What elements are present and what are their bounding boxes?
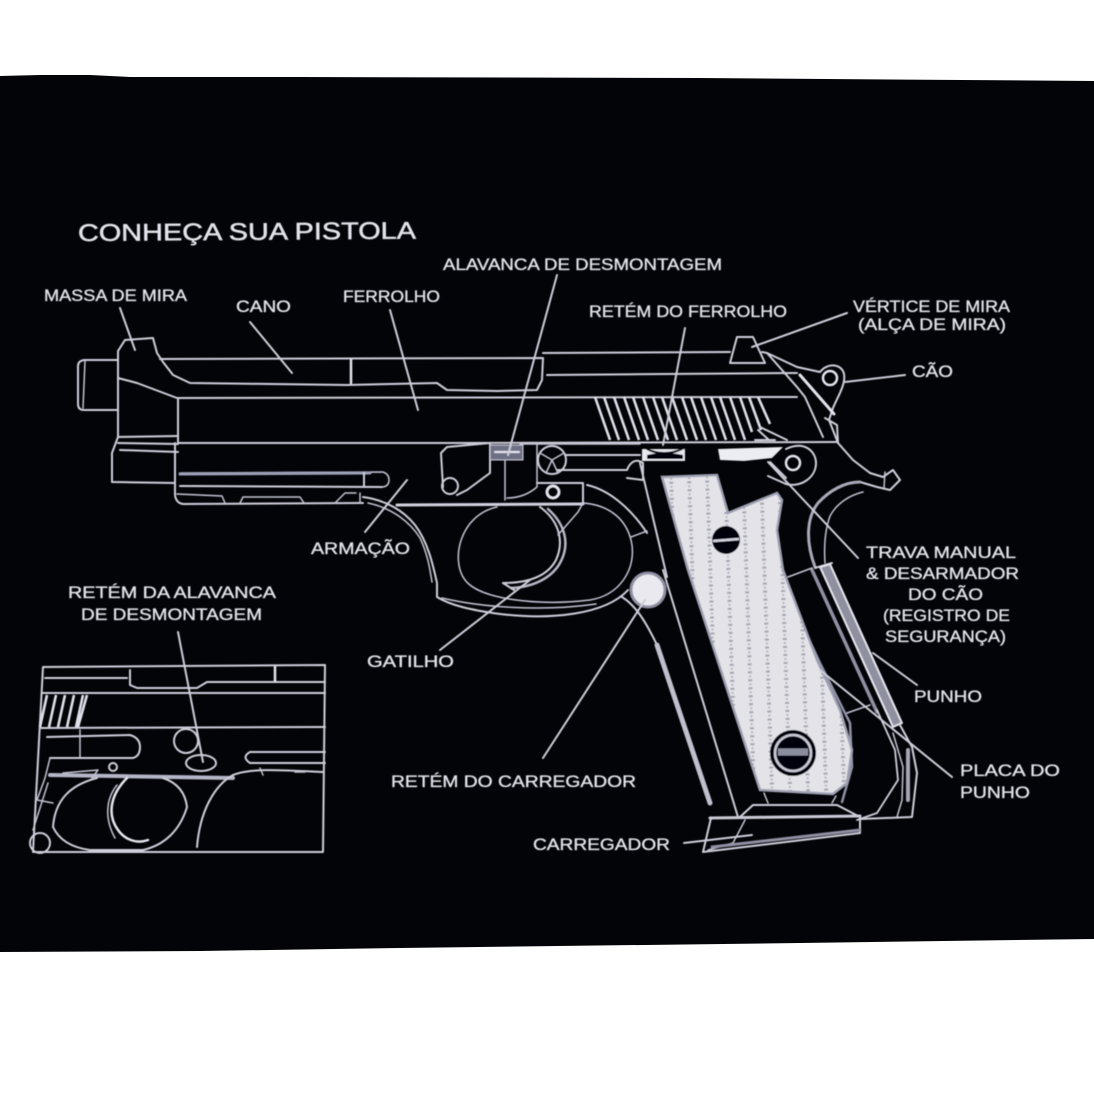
trigger <box>503 503 583 590</box>
icon: upper grip screw <box>712 526 740 554</box>
magazine catch button <box>631 573 665 607</box>
label: trava manual: DO CÃO <box>908 585 983 604</box>
label: vertice de mira <box>752 297 1011 347</box>
label: gatilho: GATILHO <box>367 652 454 671</box>
label: punho: PUNHO <box>914 687 982 706</box>
label: ferrolho <box>343 287 440 410</box>
label: placa do punho <box>820 670 1060 802</box>
icon: lower grip screw <box>770 730 816 776</box>
barrel and slide <box>78 338 837 483</box>
label: trava manual: TRAVA MANUAL <box>866 543 1016 562</box>
label: retem do ferrolho: RETÉM DO FERROLHO <box>589 302 787 321</box>
inset serrations <box>40 695 87 727</box>
grip frame back <box>786 443 917 820</box>
pistol diagram <box>78 337 917 852</box>
label: alavanca de desmontagem: ALAVANCA DE DESMONTAGEM <box>443 255 722 274</box>
label: cao: CÃO <box>912 362 953 381</box>
label: massa de mira: MASSA DE MIRA <box>44 286 188 305</box>
inset detail view <box>30 665 325 853</box>
panel outline ticks <box>788 568 870 713</box>
label: alavanca de desmontagem <box>443 255 722 455</box>
grip panel <box>662 475 852 803</box>
label: retem do carregador <box>391 600 645 791</box>
label: carregador: CARREGADOR <box>533 835 670 854</box>
front strap <box>622 570 738 817</box>
inner gray strip <box>812 570 877 712</box>
hammer <box>767 353 844 443</box>
label: ferrolho: FERROLHO <box>343 287 440 306</box>
label: gatilho <box>367 580 530 671</box>
inner back arc <box>825 492 863 563</box>
label: carregador <box>533 835 752 854</box>
label: massa de mira <box>44 286 188 350</box>
label: trava manual: (REGISTRO DE <box>883 606 1010 625</box>
label: punho <box>873 653 982 706</box>
label: retem do carregador: RETÉM DO CARREGADOR <box>391 772 636 791</box>
trigger guard <box>363 485 647 616</box>
label: retem do ferrolho <box>589 302 787 445</box>
label: cano <box>236 297 292 373</box>
label: vertice de mira: VÉRTICE DE MIRA <box>853 297 1011 316</box>
backstrap band <box>820 564 902 727</box>
disassembly lever area <box>441 443 667 577</box>
label: retem da alavanca de desmontagem: DE DESMONTAGEM <box>81 605 262 624</box>
label: retem da alavanca de desmontagem: RETÉM DA ALAVANCA <box>68 583 277 602</box>
frame, rail and recoil rod <box>175 443 583 505</box>
outer back arc <box>809 482 860 567</box>
rear sight <box>730 337 765 363</box>
label: placa do punho: PLACA DO <box>960 761 1060 780</box>
magazine <box>703 805 860 852</box>
label: trava manual: & DESARMADOR <box>866 564 1019 583</box>
label: armacao <box>311 480 410 558</box>
slide serrations <box>595 397 770 440</box>
safety lever <box>642 427 816 485</box>
title: CONHEÇA SUA PISTOLA <box>78 218 416 247</box>
label: vertice de mira: (ALÇA DE MIRA) <box>858 315 1006 334</box>
label: cano: CANO <box>236 297 291 316</box>
label: cao <box>845 362 953 382</box>
label: retem da alavanca de desmontagem <box>68 583 277 762</box>
label: trava manual <box>768 462 1019 646</box>
label: trava manual: SEGURANÇA) <box>885 627 1006 646</box>
rear lower strip <box>860 725 917 819</box>
label: armacao: ARMAÇÃO <box>311 539 410 558</box>
label: placa do punho: PUNHO <box>960 783 1030 802</box>
